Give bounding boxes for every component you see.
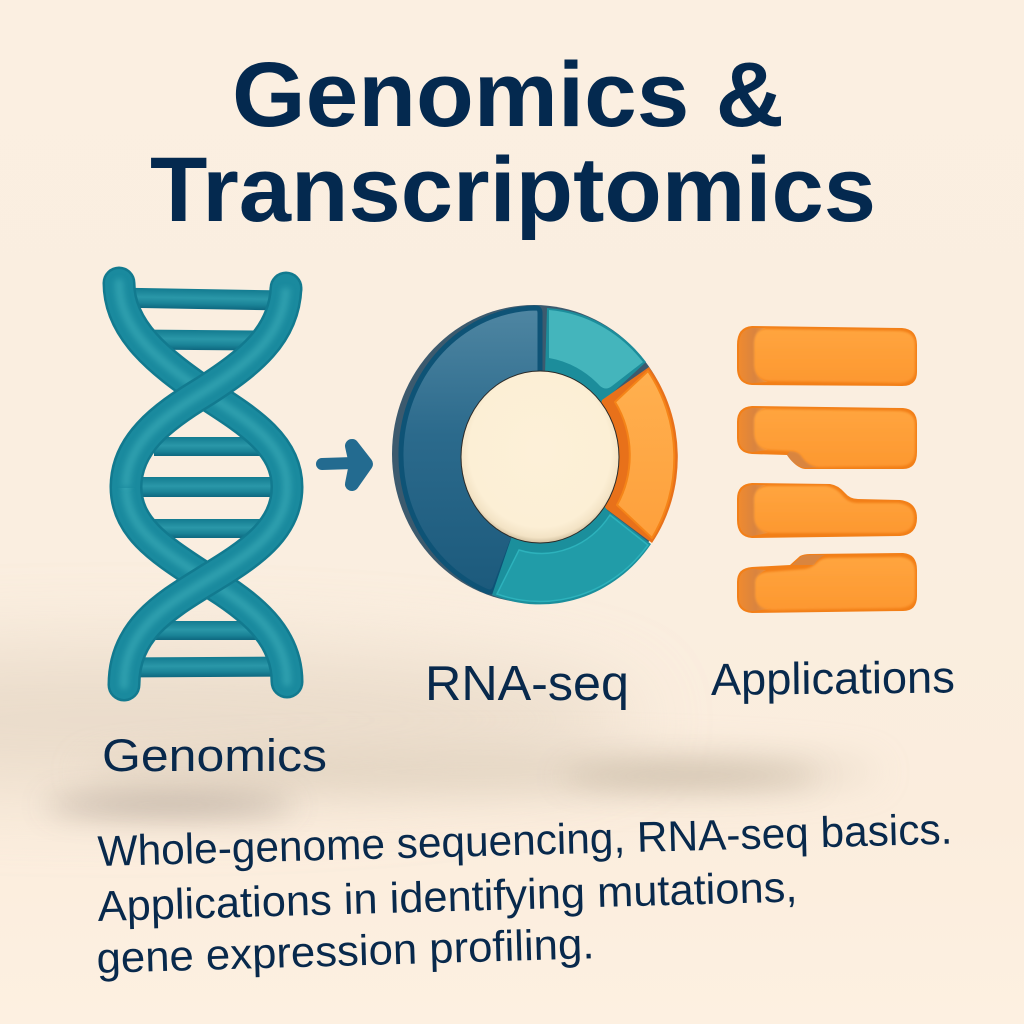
arrow (322, 446, 366, 484)
strand upper right-to-left, in front (126, 272, 302, 488)
donut segment: light teal (543, 308, 646, 440)
strand lower left-to-right, behind (126, 487, 287, 682)
bar 1 (737, 326, 917, 386)
chart: RNA-seq donut (392, 305, 678, 604)
label: Applications: Applications (711, 651, 955, 705)
bar 4 (737, 553, 917, 613)
description text: gene expression profiling. (96, 920, 595, 983)
donut segment: dark blue (401, 308, 540, 592)
description text: Whole-genome sequencing, RNA-seq basics. (97, 806, 953, 876)
donut segment: teal bottom (492, 500, 651, 604)
description text (96, 806, 953, 983)
icon: application bars (737, 326, 917, 613)
donut centre (460, 370, 620, 544)
floor shadows (0, 650, 880, 814)
title (150, 44, 876, 241)
label: RNA-seq: RNA-seq (425, 657, 629, 711)
title: Transcriptomics (150, 139, 876, 241)
title: Genomics & (232, 44, 784, 146)
icon: DNA helix (119, 272, 302, 685)
bar 3 (737, 483, 917, 538)
strand top-left to bottom-left, through right bulge (119, 283, 287, 685)
donut segment: orange (590, 367, 678, 543)
bar 2 (737, 406, 917, 469)
description text: Applications in identifying mutations, (97, 863, 798, 931)
label: Genomics: Genomics (102, 730, 327, 781)
